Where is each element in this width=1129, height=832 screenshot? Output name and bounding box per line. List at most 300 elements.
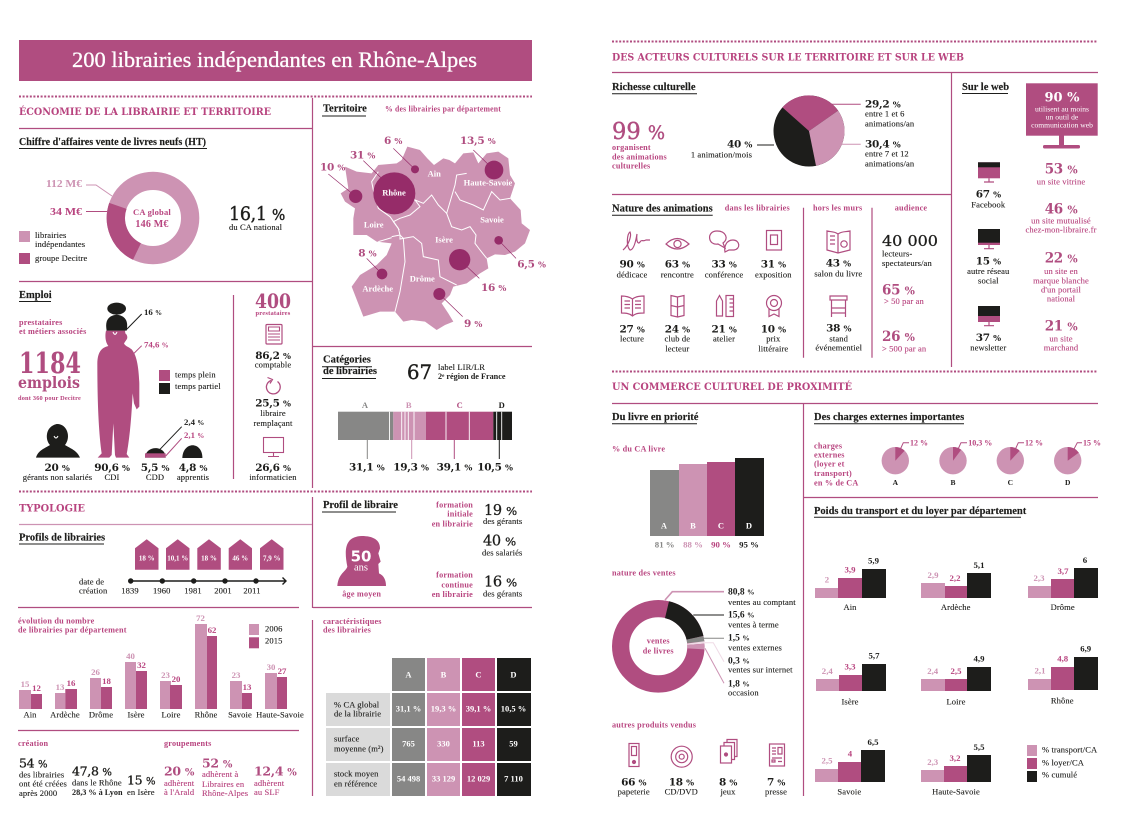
timeline: 2011: [243, 586, 261, 596]
callout: 29,2 %: entre 1 et 6: [865, 109, 904, 119]
timeline: [79, 576, 286, 596]
table: caractéristiques: 765: [402, 739, 415, 749]
heading: profil: Profil de libraire: [323, 500, 398, 511]
stat: Facebook: Facebook: [971, 199, 1006, 209]
callouts: ventes: occasion: [728, 688, 759, 698]
icon: book with rosette: [827, 231, 850, 253]
panel: caractéristiques: [323, 617, 531, 796]
labels: employment figures: 4,8 %: [179, 462, 208, 474]
donut chart: CA global: CA global: [133, 207, 171, 217]
bar chart: Drôme: 2,3: [1034, 573, 1045, 583]
stacked bar: catégories: C: [457, 400, 463, 410]
bar chart: Drôme: 3,7: [1058, 566, 1069, 576]
text: formation continue: en librairie: [432, 590, 473, 599]
text: formation initiale: [432, 501, 473, 529]
heading: nature: Nature des animations: [612, 204, 713, 215]
label: création: création: [18, 739, 48, 748]
stat: 1184 emplois: prestataires: [19, 318, 62, 327]
stat: 12,4 %: [254, 764, 297, 797]
stat: libraire remplaçant: [254, 398, 293, 428]
icon: book club: [671, 296, 684, 317]
bar chart: Ain: 2: [825, 575, 830, 585]
stat: 54 %: des librairies: [19, 769, 64, 779]
figure: apprentis dome: [182, 445, 202, 458]
heading: territoire: [322, 104, 501, 116]
bar chart: Ardèche: [921, 560, 991, 612]
bar chart: Loire: 2,4: [927, 666, 939, 676]
bar chart: Loire: Loire: [946, 696, 966, 706]
bar chart: évolution: Haute-Savoie: [256, 710, 304, 720]
bar chart: Savoie: Savoie: [837, 787, 861, 797]
table: caractéristiques: 10,5 %: [501, 704, 526, 714]
bar chart: Savoie: 6,5: [868, 737, 879, 747]
legend: années: 2015: [265, 635, 282, 645]
stat: presse: presse: [765, 786, 787, 796]
pie chart: C: C: [1008, 478, 1013, 487]
stat: formation continue: [483, 575, 522, 599]
text: formation initiale: en librairie: [432, 520, 473, 529]
callouts: ventes: 1,5 %: [728, 634, 750, 644]
pie chart: C: 12 %: [1025, 439, 1043, 448]
table: caractéristiques: 19,3 %: [431, 704, 456, 714]
bar chart: évolution: 40: [126, 651, 136, 661]
stat: autre réseau: autre réseau: [967, 266, 1010, 276]
bar chart: Isère: 5,7: [868, 651, 880, 661]
panel: profils de librairies: [19, 533, 286, 596]
stat: salon du livre: 43 %: [826, 258, 851, 270]
stat: 1184 emplois: emplois: [18, 373, 80, 392]
column headings: dans les librairies: [725, 203, 790, 212]
title banner: 200 librairies indépendantes en Rhône-Alpes: [72, 47, 477, 72]
stat: 15 %: [127, 772, 155, 797]
stat: salon du livre: salon du livre: [814, 269, 862, 279]
legend: donut: indépendantes: [35, 239, 85, 249]
stat: 67 label: 67: [407, 360, 432, 384]
stat: jeux: 8 %: [719, 777, 737, 789]
icon: journal: [770, 744, 784, 766]
label: charges externes: charges: [814, 441, 842, 450]
bar chart: évolution: Loire: [161, 710, 181, 720]
legend: temps: [159, 370, 221, 394]
map labels: départements: [362, 169, 513, 294]
figure: gérants bust: [36, 424, 80, 458]
table: caractéristiques: 54 498: [397, 774, 420, 784]
stats: audience: 40 000: [882, 232, 938, 250]
house icons: [135, 539, 284, 570]
stat: stand événementiel: [815, 323, 863, 353]
stat: lecture: [619, 324, 645, 344]
stat: atelier: 21 %: [711, 324, 737, 336]
stat: 54 %: après 2000: [19, 788, 57, 798]
bar chart: Rhône: [1028, 644, 1098, 705]
stat: 20 %: [164, 764, 195, 797]
stat: club de lecteur: lecteur: [665, 344, 689, 354]
callouts: CDD: [160, 417, 204, 456]
stats: audience: > 50 par an: [884, 296, 924, 306]
stats: sites web: un site mutualisé: [1031, 215, 1091, 225]
pie chart: A: 12 %: [910, 439, 928, 448]
map labels: départements: Rhône: [382, 188, 406, 198]
panel: emploi: [18, 289, 297, 482]
stacked bar: catégories: D: [499, 400, 505, 410]
table: caractéristiques: 113: [472, 739, 485, 749]
bar chart: CA livre: [650, 458, 764, 549]
timeline: 1960: [153, 586, 170, 596]
stat: 67 label: région de France: [444, 372, 506, 381]
legend: transport loyer: % cumulé: [1042, 770, 1077, 780]
icon: eye: [666, 238, 689, 249]
map percentages: 16 %: [481, 282, 506, 294]
pie chart: B: B: [950, 478, 956, 487]
table: caractéristiques: 39,1 %: [466, 704, 491, 714]
bar chart: CA livre: A: [661, 520, 668, 530]
table: caractéristiques: 59: [509, 739, 518, 749]
bar chart: Ain: [815, 555, 886, 612]
stat: 99 %: culturelles: [612, 161, 650, 170]
panel: du livre en priorité: [612, 412, 796, 796]
stat: 15 %: en Isère: [127, 787, 155, 797]
column headings: [725, 203, 927, 212]
callout: 30,4 %: animations/an: [865, 159, 915, 169]
map percentages: 6 %: [384, 135, 402, 147]
icon: head 50 ans: [337, 536, 386, 586]
bar chart: évolution: 18: [102, 676, 112, 686]
panel: nature des animations: [612, 203, 938, 354]
timeline: date de: [79, 576, 104, 586]
stat: CD/DVD: CD/DVD: [665, 786, 698, 796]
text: formation continue: continue: [441, 580, 473, 589]
map percentages: 8 %: [358, 248, 377, 260]
callout: 16 %: [126, 307, 162, 330]
pie chart: D: [1054, 439, 1101, 487]
donut chart: CA global: [116, 181, 190, 255]
label: charges externes: [814, 441, 859, 488]
stat: atelier: atelier: [713, 334, 735, 344]
bar chart: Isère: 2,4: [822, 666, 833, 676]
stat: informaticien: [249, 462, 297, 482]
stats: sites web: 22 %: [1045, 251, 1077, 267]
heading: richesse: Richesse culturelle: [612, 82, 696, 93]
stats: sites web: marque blanche: [1033, 276, 1089, 286]
icon: monitor newsletter: [978, 306, 1000, 326]
stat: 54 %: 54 %: [19, 756, 47, 771]
stat: dédicace: dédicace: [617, 270, 647, 280]
icon: signature: [623, 232, 650, 250]
label: charges externes: (loyer et: [814, 460, 845, 469]
stats: sites web: chez-mon-libraire.fr: [1025, 225, 1097, 235]
bar chart: CA livre: 90 %: [711, 539, 731, 549]
bar chart: CA livre: 88 %: [683, 539, 703, 549]
callouts: ventes: 80,8 %: [728, 587, 755, 597]
label: 112 M€: 112 M€: [46, 178, 83, 190]
stat: 52 %: adhèrent à: [202, 769, 238, 779]
heading: évolution: de librairies par département: [18, 625, 127, 634]
legend: années: [249, 624, 282, 648]
stat: 54 %: [19, 756, 67, 798]
stat: exposition: 31 %: [761, 259, 786, 271]
stacked bar: catégories: 19,3 %: [393, 462, 429, 474]
icon: rosette: [766, 296, 782, 316]
stat: 52 %: Libraires en: [202, 779, 245, 789]
stats: formation initiale: des gérants: [483, 516, 522, 526]
bar chart: CA livre: 95 %: [739, 539, 759, 549]
labels: employment figures: apprentis: [177, 472, 209, 482]
stat: salon du livre: [814, 258, 862, 279]
stat: conférence: [705, 259, 743, 280]
stat: informaticien: 26,6 %: [255, 462, 291, 474]
bar chart: Isère: [816, 651, 886, 706]
timeline: 2001: [214, 586, 232, 596]
legend: temps: temps plein: [175, 370, 216, 380]
icon: open book: [622, 296, 644, 316]
house icons: 18 %: [201, 554, 217, 562]
stat: stand événementiel: événementiel: [815, 343, 863, 353]
label: 112 M€: [46, 178, 112, 196]
stat: stand événementiel: stand: [829, 334, 849, 344]
callout: 40 %: 1 animation/mois: [691, 149, 752, 159]
stat: comptable: [255, 350, 291, 370]
callouts: CDD: 2,4 %: [184, 417, 204, 427]
map labels: départements: Ain: [428, 169, 441, 179]
legend: donut: librairies: [35, 230, 66, 240]
callout: 74,6 %: 74,6 %: [144, 340, 169, 350]
stat: autre réseau: 15 %: [976, 255, 1001, 267]
column headings: audience: [895, 203, 927, 212]
stat: 20 %: à l'Arald: [164, 787, 195, 797]
labels: employment figures: 5,5 %: [141, 462, 170, 474]
donut chart: ventes: [621, 609, 696, 684]
house icons: 18 %: [139, 554, 155, 562]
stat: 52 %: [202, 756, 248, 798]
table: caractéristiques: [326, 658, 531, 796]
bar chart: évolution: 15: [21, 679, 30, 689]
panel: groupements: [164, 739, 297, 798]
stat: 47,8 %: 47,8 %: [72, 764, 112, 779]
panel: territoire: [320, 104, 546, 330]
column headings: hors les murs: [813, 203, 862, 212]
icon: stand: [830, 296, 847, 317]
big monitor: 90 %: communication web: [1031, 121, 1093, 130]
callout: 74,6 %: [133, 340, 169, 354]
stat: 99 %: des animations: [612, 152, 667, 161]
figure: CDI person: [97, 303, 139, 458]
pie chart: D: D: [1065, 478, 1071, 487]
stat: 1184 emplois: 1184: [19, 346, 81, 380]
label: caractéristiques: des librairies: [323, 626, 371, 635]
stat: 1184 emplois: [18, 318, 86, 402]
stat: CD/DVD: [665, 777, 698, 796]
stat: libraire remplaçant: remplaçant: [254, 418, 293, 428]
label: groupements: groupements: [164, 739, 212, 748]
timeline: 1839: [121, 586, 139, 596]
stat: 54 %: ont été créées: [19, 779, 67, 789]
stat: 52 %: Rhône-Alpes: [202, 788, 248, 798]
panel: évolution par département: [18, 613, 304, 720]
heading: poids: Poids du transport et du loyer par département: [814, 506, 1027, 517]
stat: exposition: [755, 259, 792, 280]
bar chart: Loire: [921, 654, 991, 706]
stats: audience: > 500 par an: [882, 344, 927, 354]
heading: chiffre d'affaires: Chiffre d'affaires vente de livres neufs (HT): [19, 137, 206, 148]
section heading: typologie: TYPOLOGIE: [19, 503, 85, 515]
stats: audience: lecteurs-: [882, 249, 912, 259]
bar chart: Drôme: Drôme: [1051, 602, 1075, 612]
map labels: départements: Ardèche: [362, 284, 393, 294]
stat: dédicace: 90 %: [619, 259, 645, 271]
map labels: départements: Isère: [435, 235, 453, 245]
bar chart: Haute-Savoie: 2,3: [927, 757, 939, 767]
table: caractéristiques: surface: [334, 734, 359, 744]
table: caractéristiques: 7 110: [504, 774, 523, 784]
stat: dédicace: [617, 259, 647, 280]
stat: 1184 emplois: dont 360 pour Decitre: [18, 395, 81, 402]
icon: monitor: [264, 438, 284, 456]
stat: 99 %: [612, 119, 667, 170]
stat: rencontre: rencontre: [661, 270, 694, 280]
stat: 1184 emplois: et métiers associés: [19, 327, 86, 336]
heading: territoire: Territoire: [323, 104, 367, 115]
stacked bar: catégories: 39,1 %: [437, 462, 472, 474]
bar chart: Rhône: 4,8: [1057, 654, 1069, 664]
big monitor: 90 %: [1026, 83, 1098, 148]
icon: head 50 ans: ans: [354, 563, 368, 574]
stat: presse: 7 %: [767, 777, 785, 789]
label: caractéristiques: caractéristiques: [323, 617, 382, 626]
bar chart: Haute-Savoie: 5,5: [974, 742, 985, 752]
bar chart: Rhône: 2,1: [1034, 665, 1046, 675]
bar chart: évolution: Rhône: [195, 710, 218, 720]
label: charges externes: en % de CA: [814, 479, 859, 488]
bar chart: évolution: Ain: [23, 710, 37, 720]
map labels: départements: Drôme: [410, 274, 435, 284]
stat: club de lecteur: [664, 324, 690, 354]
map: Rhône-Alpes: [328, 147, 530, 330]
section heading: économie: ÉCONOMIE DE LA LIBRAIRIE ET TERRITOIRE: [19, 104, 271, 118]
stats: sites web: national: [1047, 294, 1076, 304]
stat: libraire remplaçant: 25,5 %: [255, 398, 291, 410]
house icons: 46 %: [232, 554, 248, 562]
bar chart: CA livre: C: [718, 520, 724, 530]
label: 34 M€: 34 M€: [50, 206, 83, 218]
stat: 20 %: adhèrent: [164, 778, 195, 788]
bar chart: Haute-Savoie: [921, 742, 991, 797]
map percentages: 6,5 %: [517, 259, 546, 271]
stacked bar: catégories: B: [406, 400, 412, 410]
table: caractéristiques: % CA global: [334, 700, 380, 710]
callouts: ventes: 0,3 %: [728, 656, 750, 666]
stat: Facebook: [971, 189, 1006, 209]
callout: 30,4 %: entre 7 et 12: [865, 149, 909, 159]
heading: emploi: Emploi: [19, 290, 52, 301]
stat: papeterie: [618, 777, 650, 796]
stat: rencontre: [661, 259, 694, 280]
stat: prix littéraire: [758, 324, 788, 354]
legend: années: 2006: [265, 624, 282, 634]
icon: refresh: [266, 378, 280, 394]
bar chart: Savoie: 4: [848, 749, 853, 759]
text: formation initiale: formation: [436, 501, 473, 510]
stats: sites web: d'un portail: [1041, 284, 1082, 294]
stat: 15 %: 15 %: [127, 772, 155, 787]
icon: speech bubbles: [710, 231, 739, 252]
bar chart: Ardèche: 2,9: [928, 570, 939, 580]
map labels: départements: Savoie: [480, 215, 504, 225]
house icons: 10,1 %: [167, 554, 188, 562]
bar chart: Drôme: 6: [1083, 555, 1088, 565]
labels: employment figures: CDD: [146, 472, 164, 482]
panel: catégories de librairies: [322, 355, 513, 474]
stat: 99 %: 99 %: [612, 119, 665, 145]
stats: audience: 65 %: [882, 282, 915, 298]
bar chart: Isère: 3,3: [844, 661, 856, 671]
callout: 16 %: 16 %: [144, 307, 162, 317]
table: caractéristiques: stock moyen: [334, 769, 379, 779]
stat: rencontre: 63 %: [665, 259, 690, 271]
stat: formation continue: 16 %: [484, 575, 517, 591]
bar chart: évolution: 72: [196, 613, 206, 623]
callout: 29,2 %: [832, 98, 915, 129]
label: âge moyen: âge moyen: [342, 590, 381, 599]
icon: frame: [766, 230, 782, 250]
stat: conférence: 33 %: [711, 259, 737, 271]
stat: autre réseau: social: [978, 275, 999, 285]
stat: 20 %: 20 %: [164, 764, 195, 779]
callout: 40 %: [691, 139, 774, 159]
table: caractéristiques: 330: [437, 739, 450, 749]
stat: libraire remplaçant: libraire: [260, 408, 286, 418]
bar chart: Haute-Savoie: 3,2: [950, 753, 961, 763]
legend: donut: [19, 230, 88, 264]
stats: formation initiale: 40 %: [483, 534, 516, 550]
pie chart: A: [882, 439, 928, 487]
icon: cartes: [720, 740, 737, 763]
labels: employment figures: [23, 462, 209, 482]
table: caractéristiques: moyenne (m²): [334, 744, 384, 754]
panel: chiffre d'affaires: [19, 137, 285, 264]
text: formation continue: formation: [436, 571, 473, 580]
stat: newsletter: [970, 332, 1006, 353]
bar chart: évolution: 27: [278, 666, 287, 676]
bar chart: évolution: [19, 613, 304, 720]
stats: formation initiale: 19 %: [484, 503, 517, 519]
stat: informaticien: informaticien: [249, 472, 297, 482]
stats: formation initiale: [482, 503, 522, 558]
label: 34 M€: [50, 206, 107, 218]
bar chart: Loire: 2,5: [950, 666, 962, 676]
stacked bar: catégories: 10,5 %: [477, 462, 513, 474]
bar chart: évolution: 23: [161, 670, 170, 680]
map percentages: 9 %: [464, 318, 482, 330]
stats: formation initiale: des salariés: [482, 548, 522, 558]
callouts: ventes: ventes à terme: [728, 620, 779, 630]
stats: sites web: 46 %: [1045, 201, 1077, 217]
table: caractéristiques: A: [405, 670, 412, 680]
stacked bar: catégories: 31,1 %: [349, 462, 385, 474]
label: charges externes: externes: [814, 450, 845, 460]
stat: jeux: jeux: [719, 786, 736, 796]
table: caractéristiques: 31,1 %: [396, 704, 421, 714]
pie chart: C: [997, 439, 1043, 487]
donut chart: ventes: ventes: [647, 636, 670, 645]
bar chart: évolution: 26: [91, 667, 100, 677]
stats: sites web: un site vitrine: [1037, 176, 1085, 186]
table: caractéristiques: C: [475, 670, 482, 680]
section heading: acteurs culturels: DES ACTEURS CULTURELS SUR LE TERRITOIRE ET SUR LE WEB: [612, 52, 964, 64]
icon: calculator: [266, 324, 282, 344]
bar chart: CA livre: B: [690, 520, 696, 530]
bar chart: Ardèche: 2,2: [950, 573, 961, 583]
bar chart: évolution: 13: [243, 682, 252, 692]
